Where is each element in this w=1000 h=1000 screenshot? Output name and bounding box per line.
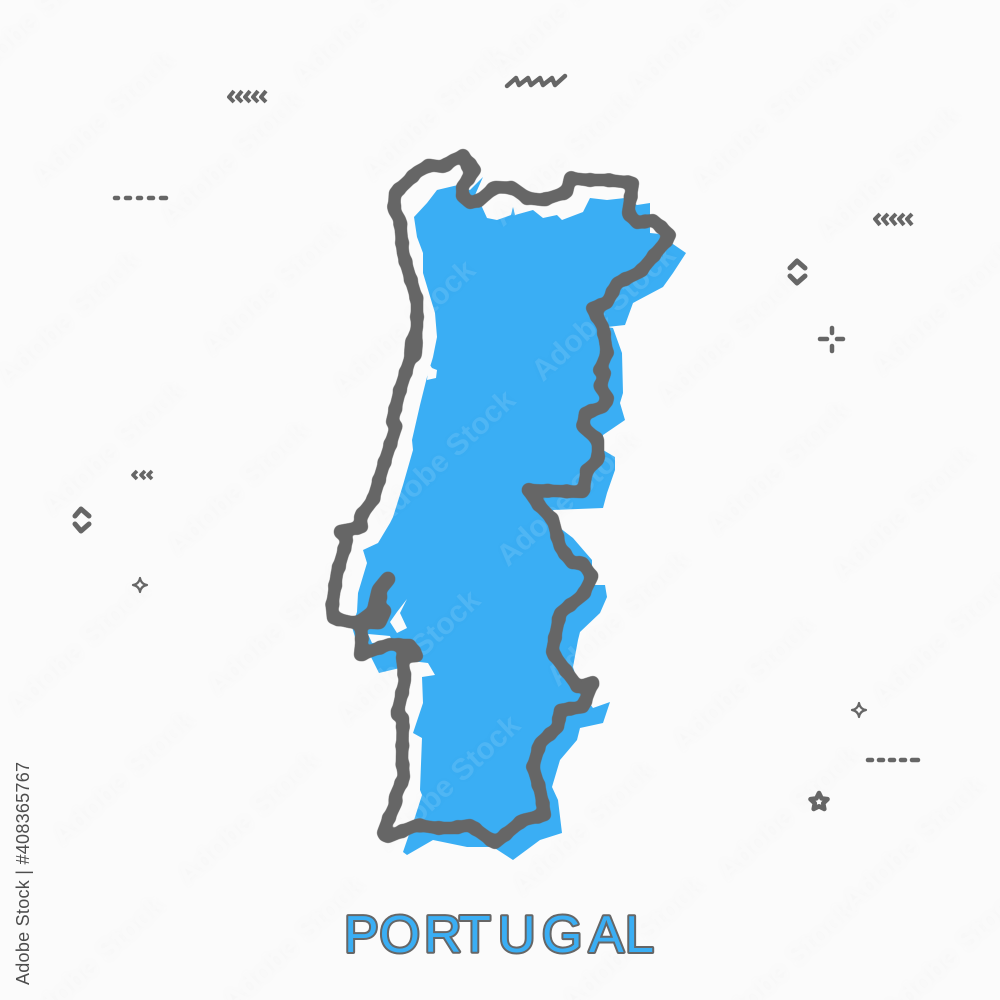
icon: sparkle left <box>133 578 147 592</box>
watermark pattern: Adobe Stock <box>200 553 357 703</box>
watermark pattern: Adobe Stock <box>330 583 487 733</box>
map: grey offset outline <box>332 156 670 843</box>
watermark pattern: Adobe Stock <box>45 703 202 853</box>
credit: vertical stock id: Adobe Stock | #408365767 <box>13 762 33 985</box>
icon: chevrons top left <box>229 91 266 102</box>
coast bump <box>413 342 414 354</box>
watermark pattern: Adobe Stock <box>195 213 352 363</box>
watermark pattern: Adobe Stock <box>365 383 522 533</box>
watermark pattern: Adobe Stock <box>540 543 697 693</box>
watermark pattern: Adobe Stock <box>325 253 482 403</box>
icon: zigzag <box>507 76 565 86</box>
title: PORTUGAL: PORTUGAL <box>344 906 654 964</box>
north loop bump <box>468 166 472 170</box>
watermark pattern: Adobe Stock <box>160 413 317 563</box>
watermark pattern: Adobe Stock <box>825 438 982 588</box>
watermark pattern: Adobe Stock <box>490 423 647 573</box>
icon: small chevrons left <box>133 471 152 479</box>
icon: double chevron left <box>75 509 89 531</box>
icon: chevrons top right <box>875 214 912 225</box>
watermark pattern: Adobe Stock <box>505 753 662 903</box>
watermark pattern: Adobe Stock <box>25 43 182 193</box>
watermark pattern: Adobe Stock <box>685 48 842 198</box>
map: blue country fill <box>352 177 686 860</box>
watermark pattern: Adobe Stock <box>0 573 157 723</box>
icon: dashes bottom right <box>868 758 918 762</box>
estuary: Sado <box>390 599 407 633</box>
watermark pattern: Adobe Stock <box>835 768 992 918</box>
icon: crosshair plus <box>820 328 843 351</box>
watermark pattern: Adobe Stock <box>700 393 857 543</box>
icon: sparkle right <box>852 703 866 717</box>
watermark pattern: Adobe Stock <box>710 738 867 888</box>
lagoon: Aveiro <box>427 356 437 380</box>
watermark pattern: Adobe Stock <box>650 263 807 413</box>
peninsula detail: Lisbon bay <box>362 579 388 622</box>
watermark pattern: Adobe Stock <box>35 373 192 523</box>
watermark pattern: Adobe Stock <box>370 708 527 858</box>
icon: double chevron right <box>790 261 805 283</box>
outline beads <box>332 156 670 843</box>
watermark pattern: Adobe Stock <box>170 743 327 893</box>
watermark pattern: Adobe Stock <box>525 238 682 388</box>
watermark pattern: Adobe Stock <box>355 38 512 188</box>
icon: dashes top left <box>115 196 166 200</box>
watermark pattern: Adobe Stock <box>153 83 310 233</box>
coast gap <box>368 634 392 643</box>
watermark pattern: Adobe Stock <box>485 83 642 233</box>
watermark pattern: Adobe Stock <box>665 608 822 758</box>
icon: star <box>810 793 828 809</box>
watermark pattern: Adobe Stock <box>810 98 967 248</box>
